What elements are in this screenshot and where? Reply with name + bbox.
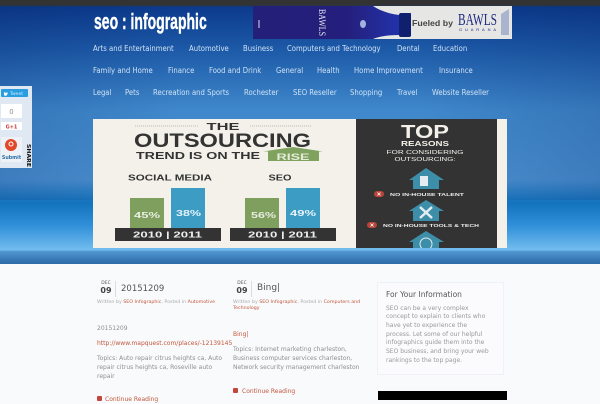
- post 1 topics: repair: [97, 373, 115, 380]
- navigation menu: Rochester: [244, 87, 278, 97]
- icon: house 3: [409, 231, 444, 248]
- social media bars: [115, 172, 221, 241]
- post 2 meta: [233, 300, 360, 311]
- navigation menu: Travel: [397, 87, 417, 97]
- navigation menu: Family and Home: [93, 65, 153, 75]
- sidebar text: process. Let some of our helpful: [386, 331, 482, 338]
- social share widget: SHARE: [25, 144, 31, 168]
- reason 2: [367, 222, 480, 228]
- logo title: seo : infographic: [94, 9, 207, 34]
- navigation menu: [93, 43, 489, 97]
- sidebar text: [386, 304, 489, 364]
- navigation menu: Pets: [125, 87, 139, 97]
- sidebar text: SEO business, and bring your web: [386, 348, 489, 355]
- social media bars: SOCIAL MEDIA: [128, 172, 212, 182]
- post 1 topics: Topics: Auto repair citrus heights ca, Auto: [97, 355, 222, 362]
- navigation menu: Arts and Entertainment: [93, 43, 174, 53]
- seo bars: SEO: [268, 172, 292, 182]
- post 2 topics: Network security management charleston: [233, 364, 359, 371]
- navigation menu: Shopping: [350, 87, 382, 97]
- sidebar text: infographics guide them into the: [386, 339, 484, 346]
- post 2 date: [233, 281, 252, 297]
- navigation menu: General: [276, 65, 303, 75]
- reason 1: NO IN-HOUSE TALENT: [390, 192, 464, 197]
- seo bars: 49%: [290, 209, 316, 218]
- post 2 topics: Business computer services charleston,: [233, 355, 352, 362]
- post 2 continue reading: Continue Reading: [242, 388, 295, 395]
- dark reasons panel: FOR CONSIDERING: [386, 150, 464, 156]
- post 2 topics: Topics: Internet marketing charleston,: [233, 346, 347, 353]
- social media bars: 38%: [176, 209, 201, 218]
- post 1 continue reading: Continue Reading: [105, 396, 158, 403]
- navigation menu: Insurance: [439, 65, 473, 75]
- post 1 date: [97, 281, 116, 297]
- banner ad: Fueled by Bawls: BAWLS: [317, 9, 327, 36]
- social share widget: [0, 86, 32, 168]
- navigation menu: Business: [243, 43, 273, 53]
- social share widget: 0: [10, 109, 14, 116]
- post 1 date text: 20151209: [97, 325, 128, 332]
- rise arrow: RISE: [276, 152, 310, 162]
- banner ad: Fueled by Bawls: GUARANA: [459, 27, 496, 32]
- reason 1: [374, 191, 464, 197]
- seo bars: 56%: [251, 211, 276, 220]
- header background: [0, 0, 600, 264]
- infographic headline: THE: [206, 121, 240, 133]
- icon: house 1: [409, 168, 444, 189]
- banner ad: Fueled by Bawls: Fueled by: [412, 18, 453, 28]
- navigation menu: Automotive: [189, 43, 229, 53]
- reason 2: NO IN-HOUSE TOOLS & TECH: [383, 223, 480, 228]
- post 2 date: 09: [236, 286, 248, 295]
- navigation menu: Education: [433, 43, 467, 53]
- post 1 title: 20151209: [121, 284, 164, 294]
- post 1 date: 09: [100, 286, 112, 295]
- navigation menu: Food and Drink: [209, 65, 261, 75]
- navigation menu: Recreation and Sports: [153, 87, 229, 97]
- social media bars: 2010 | 2011: [133, 230, 203, 240]
- icon: house 2: [409, 200, 444, 221]
- post 1 date: DEC: [101, 281, 111, 286]
- sidebar heading: For Your Information: [386, 290, 462, 299]
- post 2 meta: Technology: [233, 306, 260, 311]
- post 1 link: http://www.mapquest.com/places/-12139145: [97, 340, 232, 347]
- dark reasons panel: OUTSOURCING:: [394, 157, 456, 163]
- post 1 topics: [97, 355, 222, 380]
- banner ad: Fueled by Bawls: [253, 6, 512, 39]
- featured infographic image: [93, 119, 507, 248]
- rise arrow: [263, 147, 323, 162]
- sidebar text: rankings to the top page.: [386, 357, 462, 364]
- navigation menu: Health: [317, 65, 340, 75]
- social share widget: G+1: [6, 124, 18, 130]
- navigation menu: Home Improvement: [354, 65, 423, 75]
- post 2 topics: [233, 346, 359, 371]
- post 1 topics: repair citrus heights ca, Roseville auto: [97, 364, 212, 371]
- social share widget: Submit: [2, 155, 22, 161]
- navigation menu: Website Reseller: [432, 87, 489, 97]
- navigation menu: Legal: [93, 87, 111, 97]
- dark reasons panel: REASONS: [401, 139, 449, 148]
- social media bars: 45%: [134, 211, 160, 220]
- post 2 meta: Written by SEO Infographic, Posted in Computers and: [233, 300, 360, 305]
- sidebar text: SEO can be a very complex: [386, 304, 468, 312]
- infographic headline: TREND IS ON THE: [136, 150, 260, 162]
- post 2 link: Bing|: [233, 331, 248, 338]
- post 2 title: Bing|: [257, 283, 280, 293]
- post 1 meta: Written by SEO Infographic, Posted in Automotive: [97, 300, 215, 305]
- infographic headline: OUTSOURCING: [134, 130, 311, 152]
- seo bars: [230, 172, 336, 241]
- social share widget: Tweet: [9, 91, 23, 97]
- navigation menu: Finance: [168, 65, 194, 75]
- black sidebar box: [378, 391, 507, 400]
- dark reasons panel: TOP: [401, 122, 449, 142]
- dark reasons panel: [356, 119, 497, 250]
- navigation menu: SEO Reseller: [293, 87, 337, 97]
- seo bars: 2010 | 2011: [248, 230, 318, 240]
- infographic headline: [134, 121, 311, 162]
- navigation menu: Dental: [397, 43, 420, 53]
- navigation menu: Computers and Technology: [287, 43, 381, 53]
- sidebar panel: [377, 282, 504, 375]
- sidebar text: concept to explain to clients who: [386, 313, 485, 320]
- sidebar text: have yet to experience the: [386, 322, 467, 329]
- post 2 date: DEC: [237, 281, 247, 286]
